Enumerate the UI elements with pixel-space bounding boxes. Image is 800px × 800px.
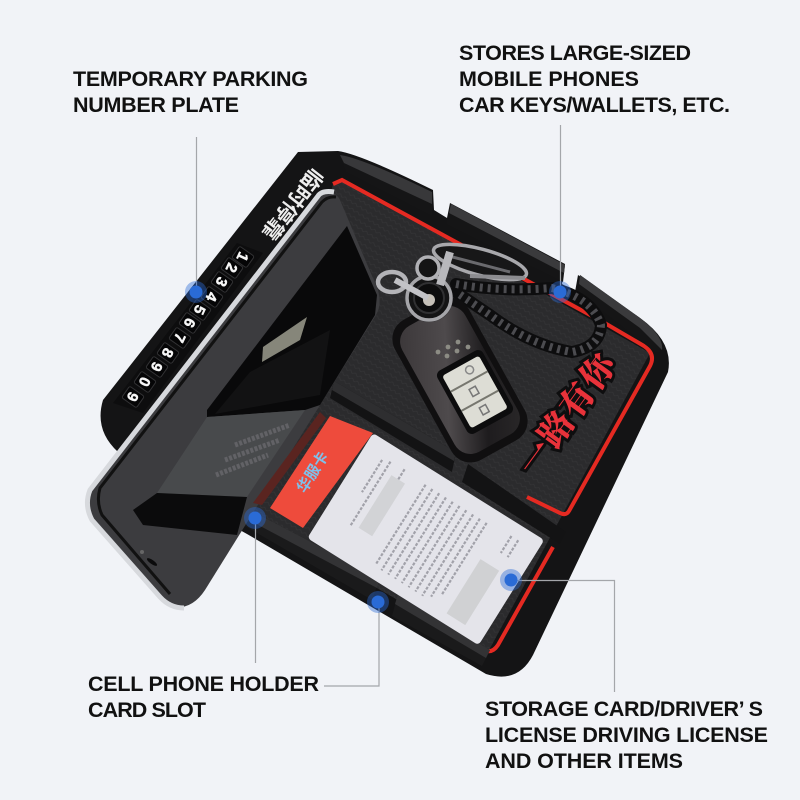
phone body xyxy=(87,192,380,607)
plate digits: 3 xyxy=(212,274,231,289)
label text xyxy=(73,67,308,117)
smartphone xyxy=(87,192,380,608)
plate digits xyxy=(123,249,252,404)
label text: CAR KEYS/WALLETS, ETC. xyxy=(459,93,730,117)
key fob xyxy=(384,290,536,470)
callout: cell phone holder and card slot xyxy=(88,507,389,722)
label text xyxy=(88,672,319,722)
plate digits: 2 xyxy=(222,260,241,275)
plate digits: 9 xyxy=(123,389,142,404)
raised edge bars xyxy=(245,155,662,666)
white licence card xyxy=(307,433,544,645)
window reflection xyxy=(262,317,307,362)
card reflection xyxy=(157,410,305,497)
mat inner floor xyxy=(250,180,650,652)
plate lettering: 临时停靠 xyxy=(257,164,327,244)
plate digits: 5 xyxy=(190,302,209,317)
earpiece xyxy=(140,550,158,567)
product: car anti-slip storage mat xyxy=(87,151,669,677)
mat base xyxy=(101,151,669,677)
leader line xyxy=(196,137,198,292)
phone rim inner xyxy=(98,197,336,594)
phone stand xyxy=(133,493,247,535)
label text: STORES LARGE-SIZED xyxy=(459,41,691,65)
label text: MOBILE PHONES xyxy=(459,67,639,91)
plate digits: 8 xyxy=(158,345,177,360)
leader line: slot xyxy=(324,602,379,686)
plate digits: 6 xyxy=(180,315,199,330)
red reflection xyxy=(253,412,326,505)
label text: AND OTHER ITEMS xyxy=(485,749,683,773)
marker dot xyxy=(185,281,207,303)
digit keys xyxy=(122,246,254,408)
label text: NUMBER PLATE xyxy=(73,93,239,117)
plate digits: 1 xyxy=(233,249,252,264)
label text: CELL PHONE HOLDER xyxy=(88,672,319,696)
plate digits: 7 xyxy=(170,330,189,345)
phone glossy reflection xyxy=(207,226,377,417)
leader line: holder xyxy=(254,518,256,663)
callout: stores phones and keys xyxy=(459,41,730,303)
phone silver rim xyxy=(87,192,334,608)
marker dot xyxy=(500,569,522,591)
strip plate xyxy=(113,243,263,413)
plate digits: 9 xyxy=(147,359,166,374)
leader line xyxy=(560,125,562,292)
label text: CARD SLOT xyxy=(88,698,206,722)
marker dot xyxy=(549,281,571,303)
dark reflection strip xyxy=(215,330,330,414)
plate digits: 4 xyxy=(201,289,221,305)
red card xyxy=(270,416,373,528)
label text: STORAGE CARD/DRIVER’ S xyxy=(485,697,763,721)
callout: temporary parking number plate xyxy=(73,67,308,303)
callout: storage card and licence xyxy=(485,569,768,773)
marker dot: slot xyxy=(367,591,389,613)
label text xyxy=(485,697,768,773)
label text xyxy=(459,41,730,117)
label text: LICENSE DRIVING LICENSE xyxy=(485,723,768,747)
plate digits: 0 xyxy=(135,374,154,389)
braided strap xyxy=(456,284,601,352)
label text: TEMPORARY PARKING xyxy=(73,67,308,91)
red trim xyxy=(333,180,652,651)
fob buttons xyxy=(435,348,515,436)
metal key rings xyxy=(378,237,530,322)
marker dot: holder xyxy=(244,507,266,529)
fob dots xyxy=(436,340,470,358)
leader line xyxy=(511,580,614,692)
red rubber logo: 一路有你 xyxy=(503,339,628,484)
number plate strip xyxy=(113,164,327,413)
card label: 华服卡 xyxy=(293,448,332,496)
